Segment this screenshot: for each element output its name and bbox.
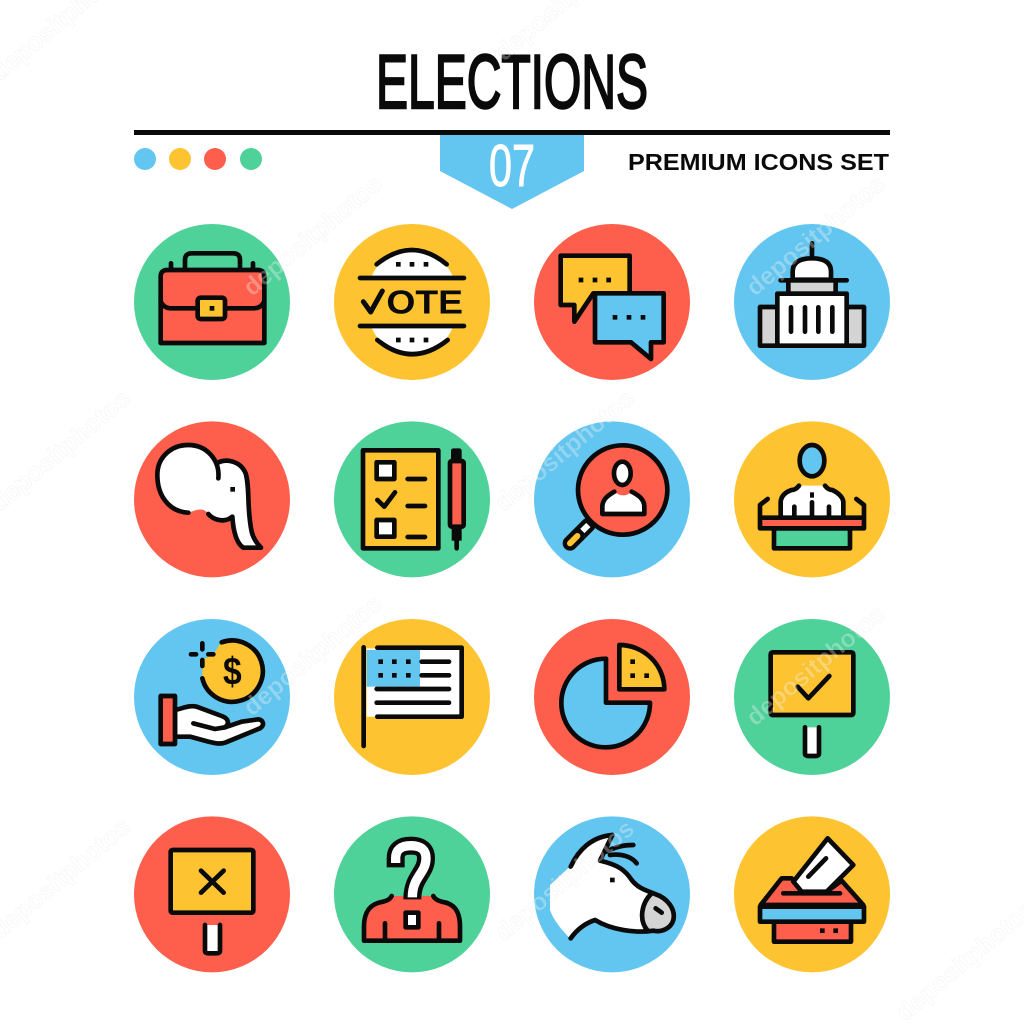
watermark: depositphotos bbox=[741, 599, 891, 732]
watermark: depositphotos bbox=[741, 169, 891, 302]
icon: donkey head bbox=[534, 816, 690, 972]
icon: pie chart bbox=[534, 619, 690, 775]
title: ELECTIONS bbox=[376, 40, 648, 125]
icon: chat bubbles bbox=[534, 224, 690, 380]
icon: person with question mark bbox=[334, 816, 490, 972]
number badge bbox=[440, 133, 584, 209]
header rule bbox=[134, 130, 890, 135]
icon: vote badge: OTE bbox=[386, 285, 463, 322]
number badge: 07 bbox=[489, 133, 535, 199]
icon: checklist and pen bbox=[334, 421, 490, 577]
icon: magnifier with person bbox=[534, 421, 690, 577]
watermark: depositphotos bbox=[238, 169, 388, 302]
icon: capitol building bbox=[734, 224, 890, 380]
icon: sign with cross bbox=[134, 816, 290, 972]
icon: ballot box bbox=[734, 816, 890, 972]
icon: sign with check bbox=[734, 619, 890, 775]
watermark: depositphotos bbox=[238, 589, 388, 722]
subtitle: PREMIUM ICONS SET bbox=[628, 149, 889, 175]
icon: american flag bbox=[334, 619, 490, 775]
icon: elephant bbox=[134, 421, 290, 577]
icon: hand with coin bbox=[134, 619, 290, 775]
icon: briefcase bbox=[134, 224, 290, 380]
icon: vote badge bbox=[334, 224, 490, 380]
colour dots bbox=[134, 148, 262, 170]
watermark: depositphotos bbox=[490, 384, 640, 517]
icon: speaker at podium bbox=[734, 421, 890, 577]
watermark: depositphotos bbox=[490, 814, 640, 947]
icon: hand with coin: $ bbox=[223, 650, 242, 694]
